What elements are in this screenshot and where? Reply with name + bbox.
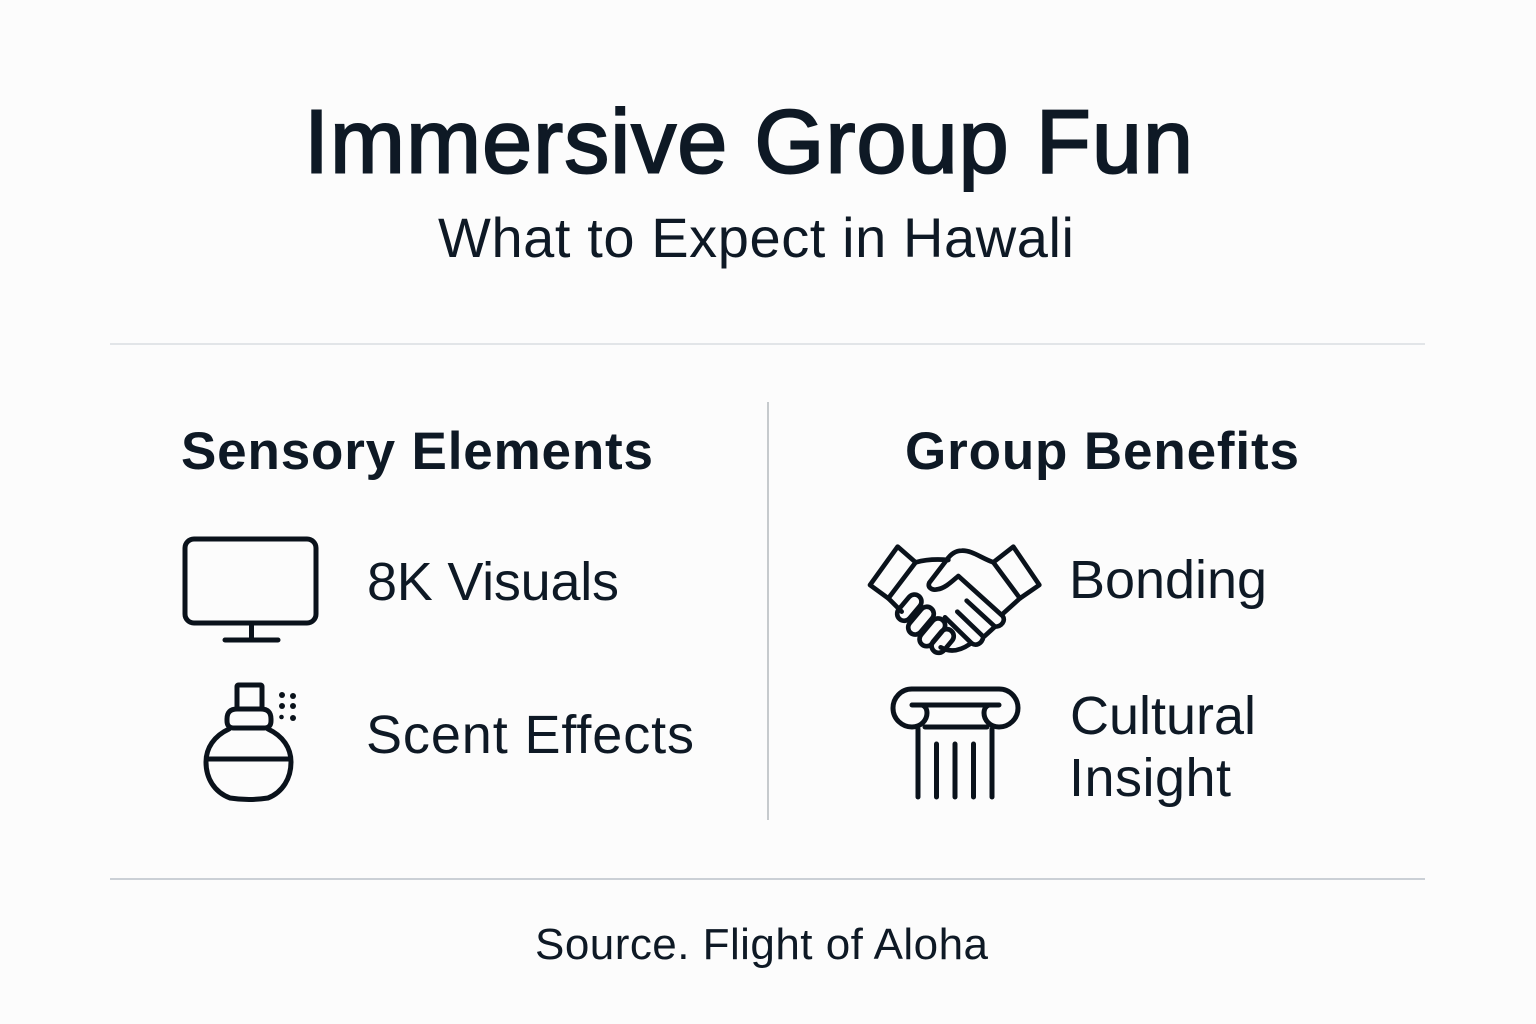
label: Scent Effects: Scent Effects (366, 705, 694, 765)
title: Immersive Group Fun (304, 92, 1193, 192)
label: Bonding: Bonding (1069, 550, 1267, 610)
icon: monitor (185, 539, 316, 640)
panel: sensory elements (181, 422, 694, 800)
label: Cultural Insight (1069, 686, 1256, 808)
icon: handshake (870, 547, 1039, 656)
heading: group benefits: Group Benefits (905, 422, 1299, 481)
label: Cultural Insight: Insight (1069, 748, 1231, 808)
icon: perfume bottle (206, 685, 296, 800)
label: Cultural Insight: Cultural (1070, 686, 1256, 746)
label: 8K Visuals: 8K Visuals (367, 552, 619, 612)
subtitle: What to Expect in Hawali (438, 206, 1074, 269)
heading: sensory elements: Sensory Elements (181, 422, 653, 481)
icon: column (893, 689, 1018, 797)
source note: Source. Flight of Aloha (535, 920, 989, 969)
panel: group benefits (870, 422, 1299, 808)
